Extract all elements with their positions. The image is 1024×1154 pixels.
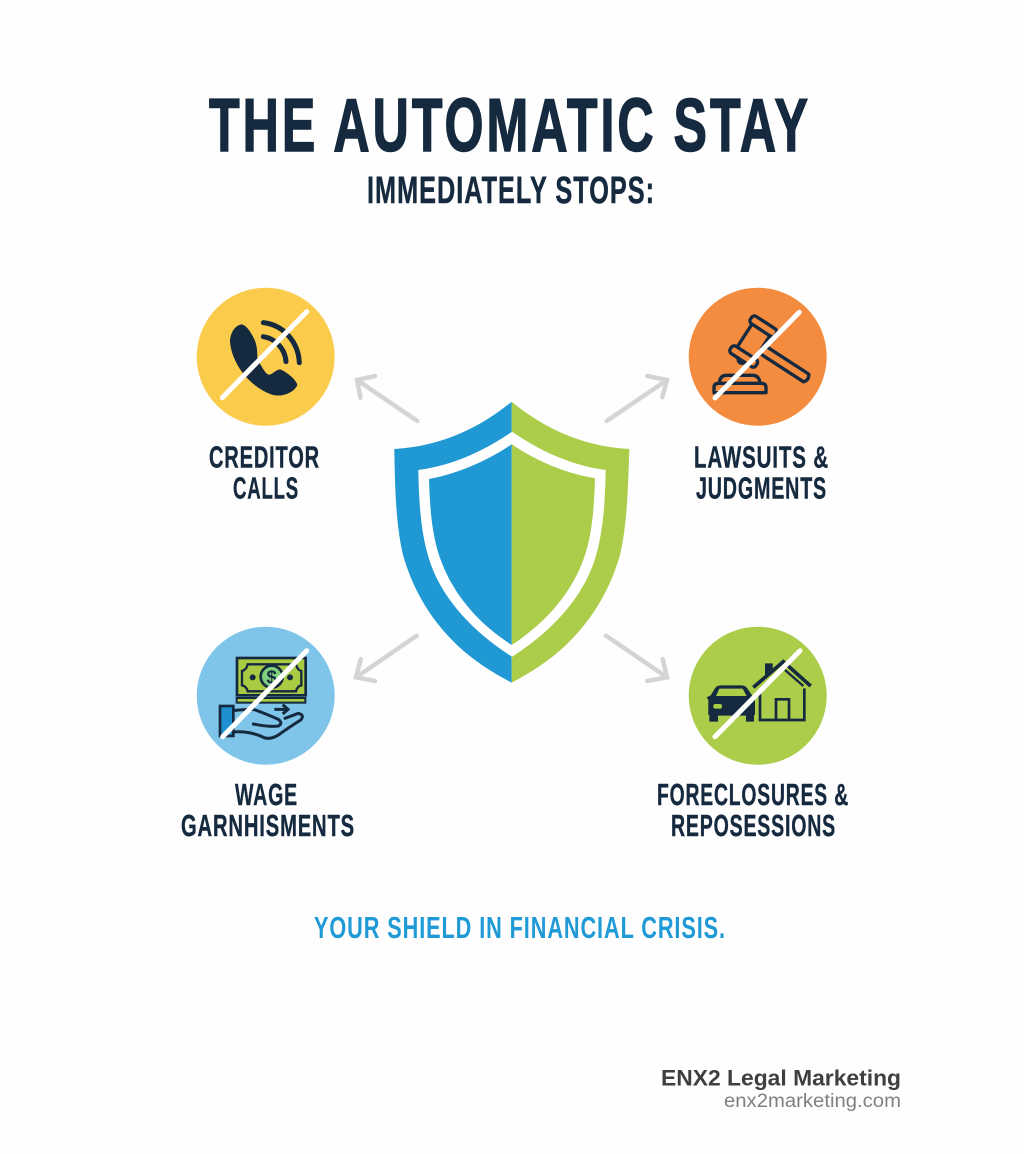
label: creditor calls: CREDITOR bbox=[209, 440, 320, 474]
label: foreclosures: FORECLOSURES & bbox=[657, 777, 849, 812]
arrow: to creditor calls bbox=[357, 376, 417, 421]
label: wage garnishments: GARNHISMENTS bbox=[181, 808, 355, 843]
label: wage garnishments: WAGE bbox=[235, 777, 298, 812]
icon: wage garnishments: $ bbox=[266, 666, 277, 687]
label: lawsuits: LAWSUITS & bbox=[694, 440, 829, 474]
tagline: YOUR SHIELD IN FINANCIAL CRISIS. bbox=[314, 910, 726, 945]
label: lawsuits bbox=[694, 440, 829, 506]
footer brand bbox=[661, 1066, 901, 1112]
footer brand: ENX2 Legal Marketing bbox=[661, 1066, 901, 1090]
label: wage garnishments bbox=[181, 777, 355, 843]
label: creditor calls: CALLS bbox=[233, 470, 299, 506]
shield bbox=[394, 402, 629, 683]
icon: foreclosures bbox=[689, 627, 827, 765]
icon: wage garnishments bbox=[197, 627, 335, 765]
arrow: to lawsuits bbox=[607, 376, 667, 421]
label: foreclosures: REPOSESSIONS bbox=[671, 808, 836, 843]
footer brand: enx2marketing.com bbox=[724, 1090, 901, 1112]
label: creditor calls bbox=[209, 440, 320, 506]
subtitle: IMMEDIATELY STOPS: bbox=[367, 170, 655, 212]
label: foreclosures bbox=[657, 777, 849, 843]
label: lawsuits: JUDGMENTS bbox=[696, 470, 827, 506]
icon: creditor calls bbox=[197, 288, 335, 426]
arrow: to wage garnishments bbox=[356, 636, 417, 681]
icon: lawsuits bbox=[689, 288, 827, 426]
arrow: to foreclosures bbox=[606, 636, 667, 681]
